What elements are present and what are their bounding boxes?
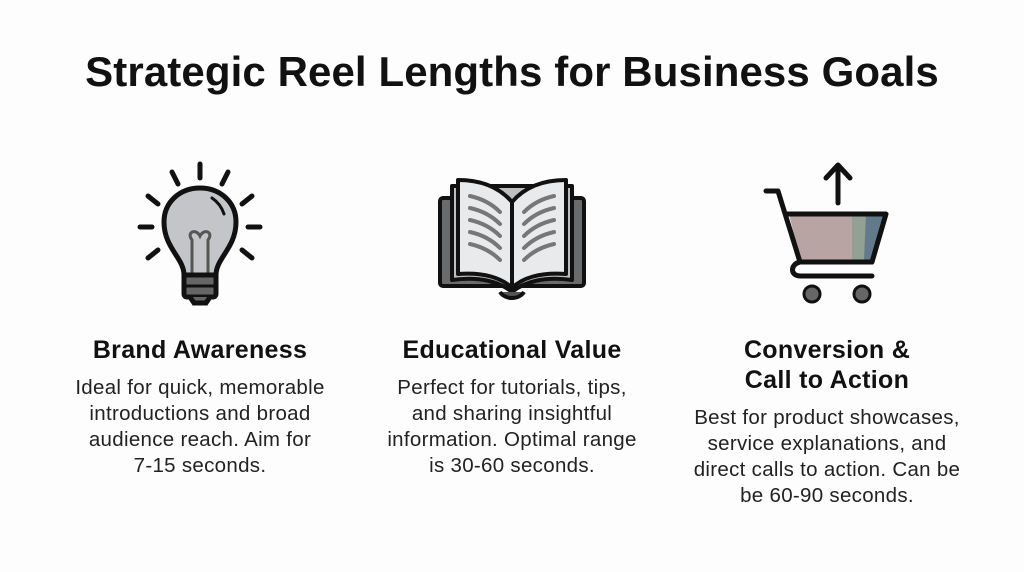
panel: conversion	[694, 336, 960, 507]
text: educational value: is 30-60 seconds.	[429, 454, 595, 477]
text: educational value: information. Optimal range	[387, 428, 637, 451]
text: conversion: Best for product showcases,	[694, 406, 960, 429]
text: brand awareness	[75, 376, 325, 477]
panel: brand awareness	[75, 336, 325, 477]
icon: open book	[440, 180, 584, 298]
icon: light bulb	[140, 164, 260, 303]
title: Strategic Reel Lengths for Business Goals	[85, 48, 939, 95]
text: conversion: be 60-90 seconds.	[740, 484, 914, 507]
heading: brand awareness: Brand Awareness	[93, 336, 307, 364]
text: conversion	[694, 406, 960, 507]
text: brand awareness: introductions and broad	[89, 402, 311, 425]
text: educational value: and sharing insightful	[412, 402, 612, 425]
text: brand awareness: Ideal for quick, memorable	[75, 376, 325, 399]
text: conversion: service explanations, and	[708, 432, 946, 455]
panel: educational value	[387, 336, 637, 477]
heading: educational value: Educational Value	[402, 336, 622, 364]
icon: shopping cart with arrow	[766, 165, 886, 302]
text: conversion: direct calls to action. Can be	[694, 458, 960, 481]
text: educational value	[387, 376, 637, 477]
text: brand awareness: audience reach. Aim for	[89, 428, 311, 451]
text: brand awareness: 7-15 seconds.	[134, 454, 266, 477]
heading: conversion: Conversion &	[744, 336, 910, 364]
heading: conversion: Call to Action	[745, 366, 909, 394]
text: educational value: Perfect for tutorials, tips,	[397, 376, 627, 399]
heading: conversion	[744, 336, 910, 394]
